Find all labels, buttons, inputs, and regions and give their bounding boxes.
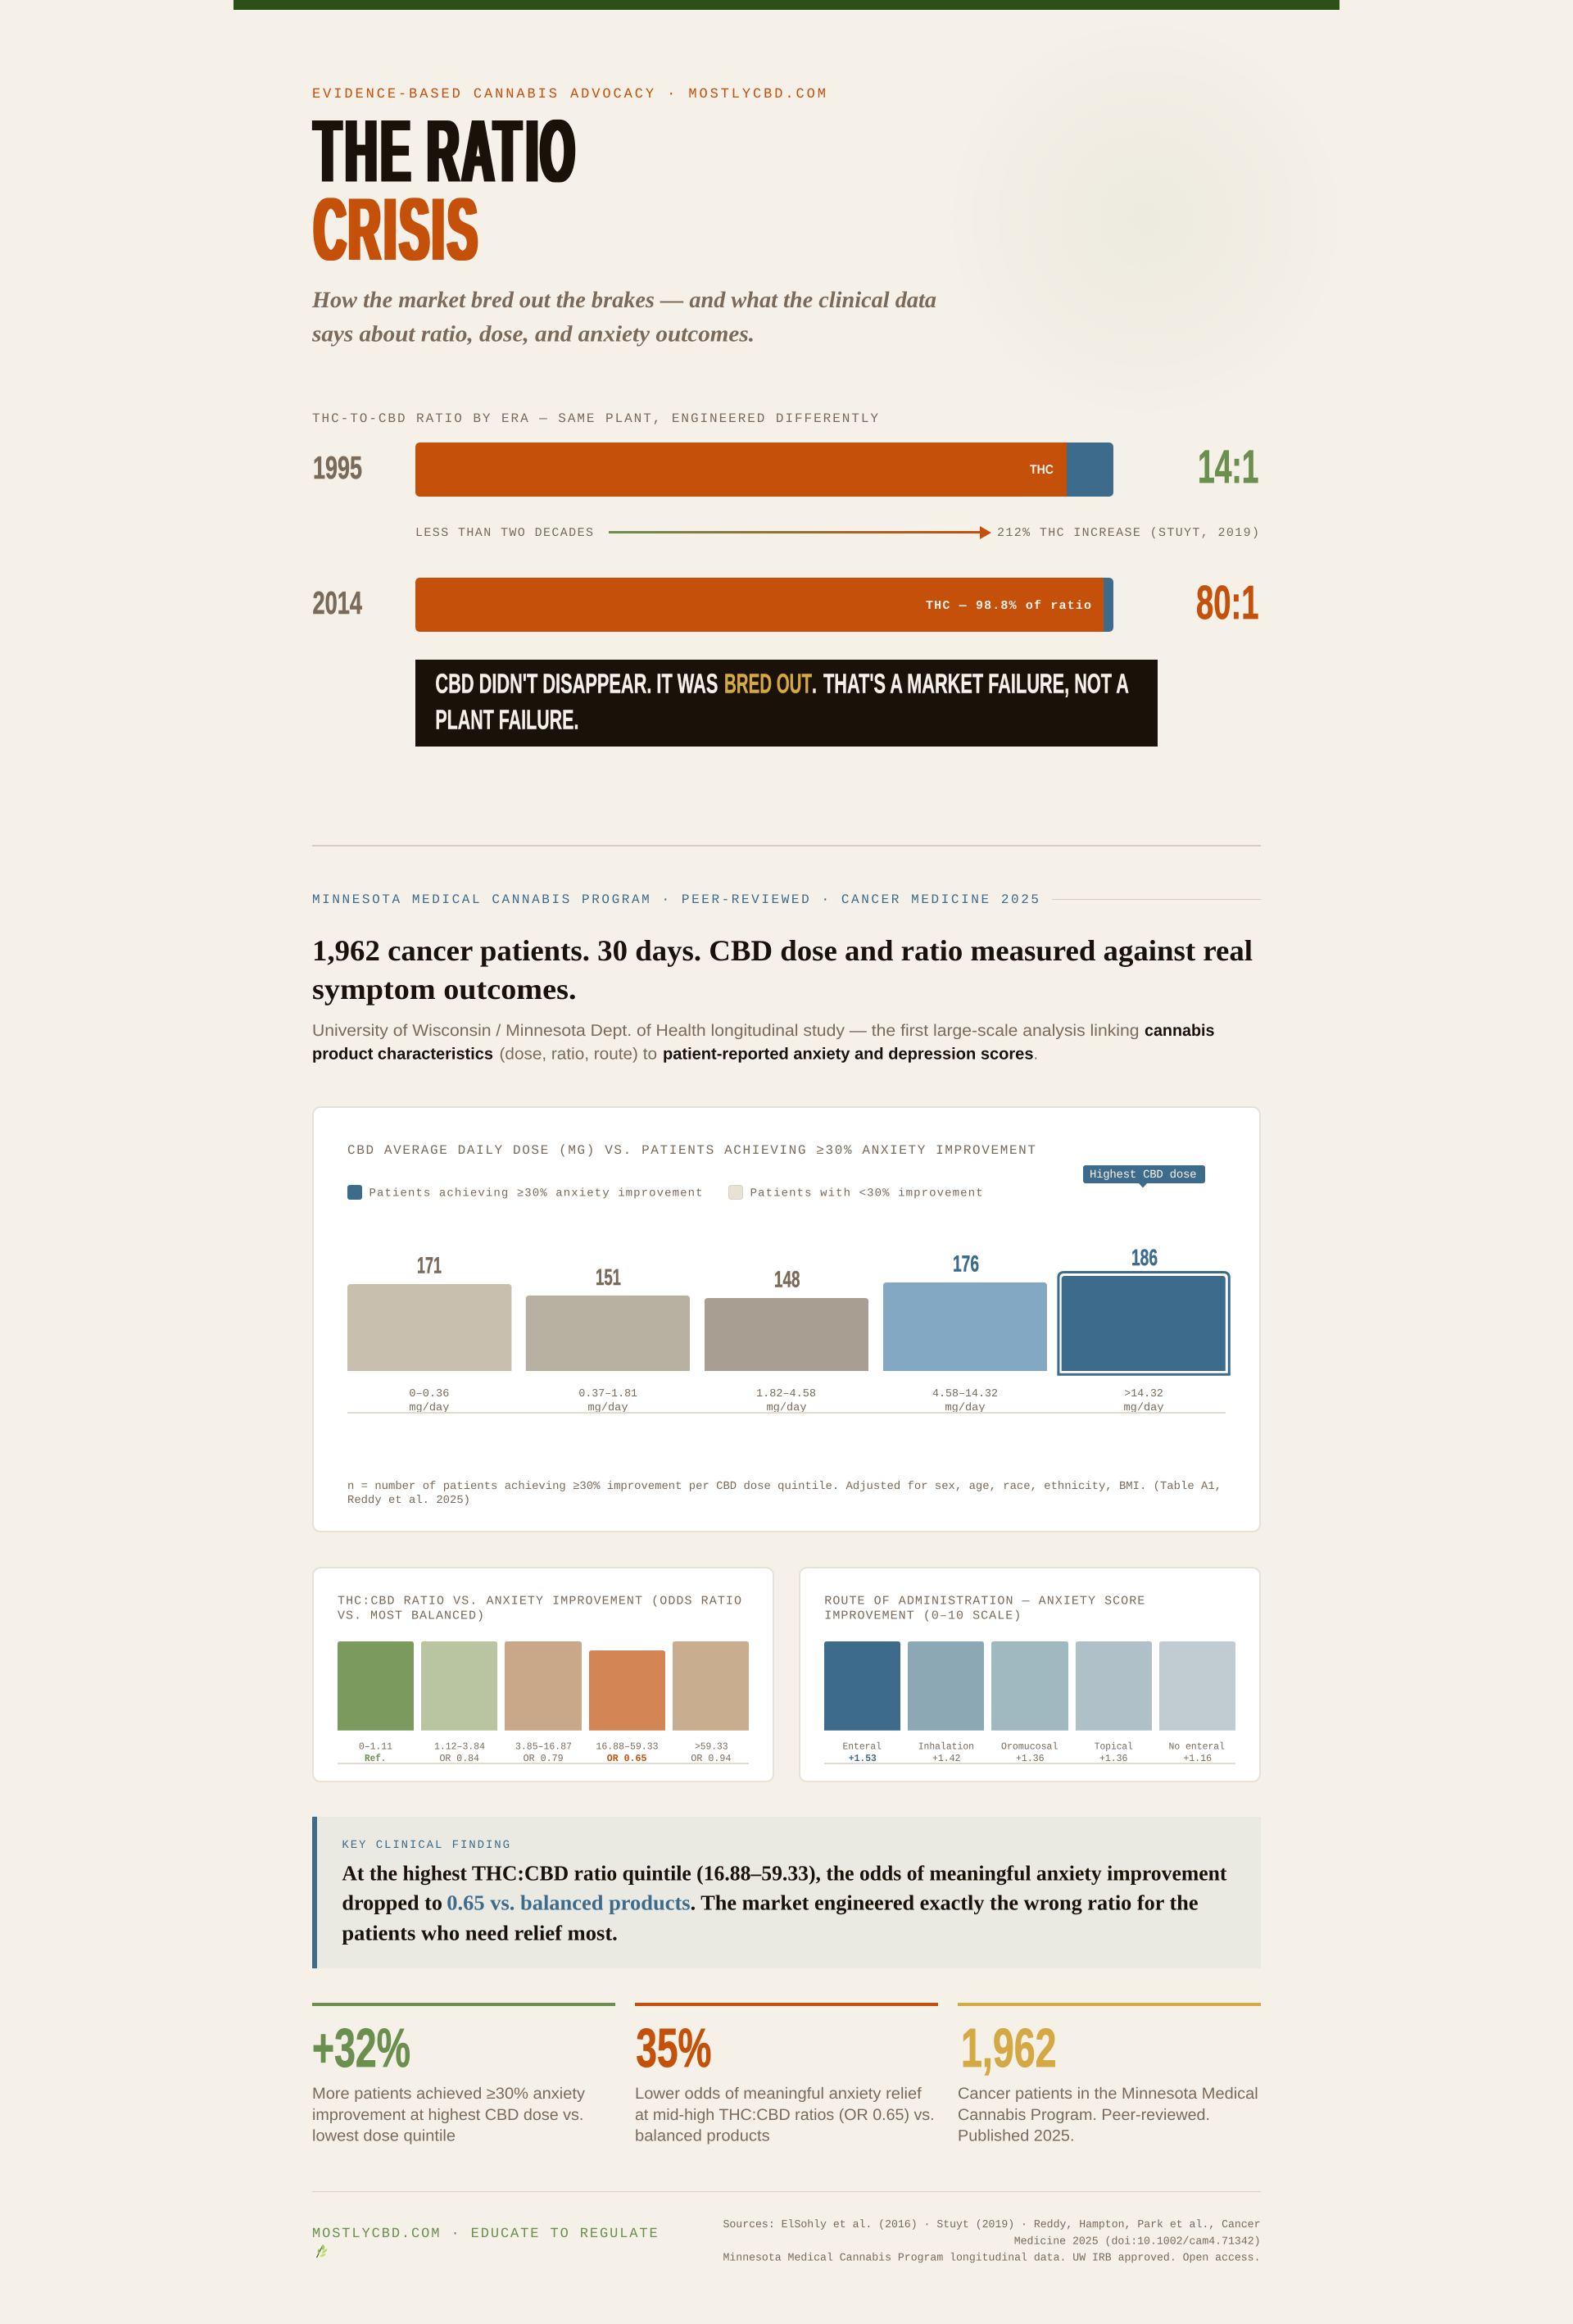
stat: 1,962 [958,2003,1261,2145]
callout: bred out: BRED OUT [724,669,812,699]
study intro [312,892,1261,1064]
dose labels: 0–0.36 [409,1388,449,1400]
stat: 35%: 35% [636,2018,711,2079]
study heading [312,934,1253,1005]
route labels: Topical [1095,1741,1133,1753]
stat: 35%: at mid-high THC:CBD ratios (OR 0.65) vs. [635,2106,935,2124]
route chart title: ROUTE OF ADMINISTRATION — ANXIETY SCORE [824,1594,1145,1608]
stat: +32%: improvement at highest CBD dose vs. [312,2106,583,2124]
study description: University of Wisconsin / Minnesota Dept. of Health longitudinal study — the first large-scale analysis linking [312,1022,1139,1040]
ratio labels: 1.12–3.84 [434,1741,485,1753]
ratio labels: >59.33 [695,1741,728,1753]
legend: Patients with <30% improvement [750,1187,983,1200]
study heading: symptom outcomes. [312,973,577,1005]
footer brand: MOSTLYCBD.COM · EDUCATE TO REGULATE [312,2226,658,2242]
stat: 1,962: Cannabis Program. Peer-reviewed. [958,2106,1210,2124]
study description [312,1022,1214,1064]
route labels: Inhalation [918,1741,974,1753]
row: 2014 [313,576,1258,632]
study section label: MINNESOTA MEDICAL CANNABIS PROGRAM · PEER-REVIEWED · CANCER MEDICINE 2025 [312,892,1039,907]
callout: bred out [415,660,1158,747]
bar values: 148 [774,1267,800,1292]
subtitle: says about ratio, dose, and anxiety outcomes. [311,321,755,347]
footer sources [723,2219,1261,2264]
subtitle: How the market bred out the brakes — and what the clinical data [311,288,936,313]
ratio labels: 0–1.11 [359,1741,392,1753]
route labels: +1.36 [1099,1753,1127,1764]
route labels: +1.42 [932,1753,960,1764]
callout: key clinical finding: . The market engineered exactly the wrong ratio for the [691,1891,1199,1915]
ratio chart title: THC:CBD RATIO VS. ANXIETY IMPROVEMENT (ODDS RATIO [338,1594,741,1608]
title: THE RATIO [314,102,575,201]
tooltip: highest cbd dose: Highest CBD dose [1090,1169,1196,1182]
dose labels: mg/day [588,1402,628,1414]
row: 1995: 14:1 [1198,441,1258,493]
stat: 35% [635,2003,938,2145]
study description: . [1034,1046,1038,1064]
footer sources: Medicine 2025 (doi:10.1002/cam4.71342) [1014,2235,1261,2248]
callout: bred out: CBD DIDN'T DISAPPEAR. IT WAS [435,669,718,699]
header [311,87,936,347]
panel: route of administration chart [800,1568,1260,1782]
footer sources: Minnesota Medical Cannabis Program longitudinal data. UW IRB approved. Open access. [723,2252,1260,2264]
dose labels [409,1388,1163,1414]
ratio labels: OR 0.94 [691,1753,731,1764]
study heading: 1,962 cancer patients. 30 days. CBD dose and ratio measured against real [312,934,1253,967]
legend [347,1185,983,1200]
row: 1995 [313,441,1258,497]
callout: key clinical finding: 0.65 vs. balanced products [447,1891,691,1915]
panel: cbd dose bar chart [313,1107,1260,1532]
dose labels: mg/day [767,1402,806,1414]
chart footnote: n = number of patients achieving ≥30% improvement per CBD dose quintile. Adjusted for sex, age, race, ethnicity, BMI. (Table A1, [347,1481,1222,1493]
chart footnote [347,1481,1222,1507]
icon: herb [316,2245,328,2258]
ratio labels: 3.85–16.87 [515,1741,572,1753]
top bar [233,0,1340,10]
dose labels: >14.32 [1124,1388,1163,1400]
subtitle [311,288,936,347]
ratio labels [359,1741,731,1764]
study description: product characteristics [312,1046,493,1064]
stat: 35%: balanced products [635,2127,770,2145]
panel: ratio by era [312,411,1259,747]
callout: bred out: THAT'S A MARKET FAILURE, NOT A [823,669,1129,699]
row: 2014: 80:1 [1196,576,1258,629]
study description: (dose, ratio, route) to [500,1046,657,1064]
stat: +32%: More patients achieved ≥30% anxiety [312,2085,585,2103]
route chart title: IMPROVEMENT (0–10 SCALE) [824,1609,1021,1623]
stat: 1,962: Cancer patients in the Minnesota Medical [958,2085,1258,2103]
arrow: less than two decades [415,526,1259,540]
arrow: less than two decades: LESS THAN TWO DECADES [415,526,593,540]
callout: bred out: . [812,669,817,699]
stat: +32%: +32% [312,2018,410,2079]
row: 2014: 2014 [313,586,362,621]
dose labels: mg/day [1124,1402,1163,1414]
chart footnote: Reddy et al. 2025) [347,1495,470,1507]
ratio section label: THC-TO-CBD RATIO BY ERA — SAME PLANT, ENGINEERED DIFFERENTLY [312,411,878,426]
eyebrow: EVIDENCE-BASED CANNABIS ADVOCACY · MOSTLYCBD.COM [312,87,826,102]
stat: 1,962: Published 2025. [958,2127,1075,2145]
callout: key clinical finding: KEY CLINICAL FINDING [342,1839,510,1852]
callout: key clinical finding: dropped to [342,1891,442,1915]
callout: key clinical finding [312,1817,1261,1968]
stat: 1,962: 1,962 [961,2018,1057,2079]
panel: thc:cbd ratio chart [313,1568,773,1782]
ratio labels: OR 0.84 [439,1753,479,1764]
ratio bars [338,1641,749,1731]
bar values [417,1245,1158,1292]
route labels: No enteral [1168,1741,1225,1753]
title [314,102,575,279]
route labels [842,1741,1225,1764]
arrow: less than two decades: 212% THC INCREASE (STUYT, 2019) [997,526,1259,540]
route labels: Enteral [842,1741,882,1753]
bar values: 171 [417,1252,442,1278]
route labels: Oromucosal [1001,1741,1058,1753]
title: CRISIS [314,179,478,279]
row: 1995: THC [1030,463,1054,477]
dose labels: 1.82–4.58 [756,1388,816,1400]
route chart title [824,1594,1145,1623]
bar values: 176 [953,1251,979,1276]
tooltip: highest cbd dose [1083,1165,1205,1188]
route bars [824,1641,1235,1731]
ratio labels: 16.88–59.33 [596,1741,659,1753]
dose labels: mg/day [945,1402,985,1414]
dose labels: 0.37–1.81 [578,1388,637,1400]
callout: bred out: PLANT FAILURE. [435,705,578,735]
dose labels: mg/day [409,1402,449,1414]
ratio labels: OR 0.79 [524,1753,564,1764]
stat: +32%: lowest dose quintile [312,2127,456,2145]
chart title: CBD AVERAGE DAILY DOSE (MG) VS. PATIENTS ACHIEVING ≥30% ANXIETY IMPROVEMENT [347,1143,1036,1158]
bars [347,1272,1229,1374]
footer [312,2219,1261,2264]
study description: patient-reported anxiety and depression scores [663,1046,1034,1064]
callout: key clinical finding: patients who need relief most. [342,1922,618,1945]
stats row [312,2003,1261,2145]
stat: 35%: Lower odds of meaningful anxiety relief [635,2085,922,2103]
callout: key clinical finding: At the highest THC:CBD ratio quintile (16.88–59.33), the odds of meaningful anxiety improvement [342,1862,1227,1886]
bar values: 151 [596,1264,621,1290]
bar values: 186 [1131,1245,1158,1270]
row: 1995: 1995 [313,451,362,486]
dose labels: 4.58–14.32 [932,1388,998,1400]
route labels: +1.53 [849,1753,877,1764]
legend: Patients achieving ≥30% anxiety improvement [369,1187,703,1200]
ratio chart title [338,1594,741,1623]
row: 2014: THC — 98.8% of ratio [926,599,1091,613]
stat: +32% [312,2003,615,2145]
ratio labels: OR 0.65 [607,1753,646,1764]
ratio labels: Ref. [365,1753,386,1764]
ratio chart title: VS. MOST BALANCED) [338,1609,484,1623]
route labels: +1.36 [1016,1753,1045,1764]
footer sources: Sources: ElSohly et al. (2016) · Stuyt (2019) · Reddy, Hampton, Park et al., Cancer [723,2219,1260,2231]
study description: cannabis [1145,1022,1214,1040]
route labels: +1.16 [1183,1753,1212,1764]
